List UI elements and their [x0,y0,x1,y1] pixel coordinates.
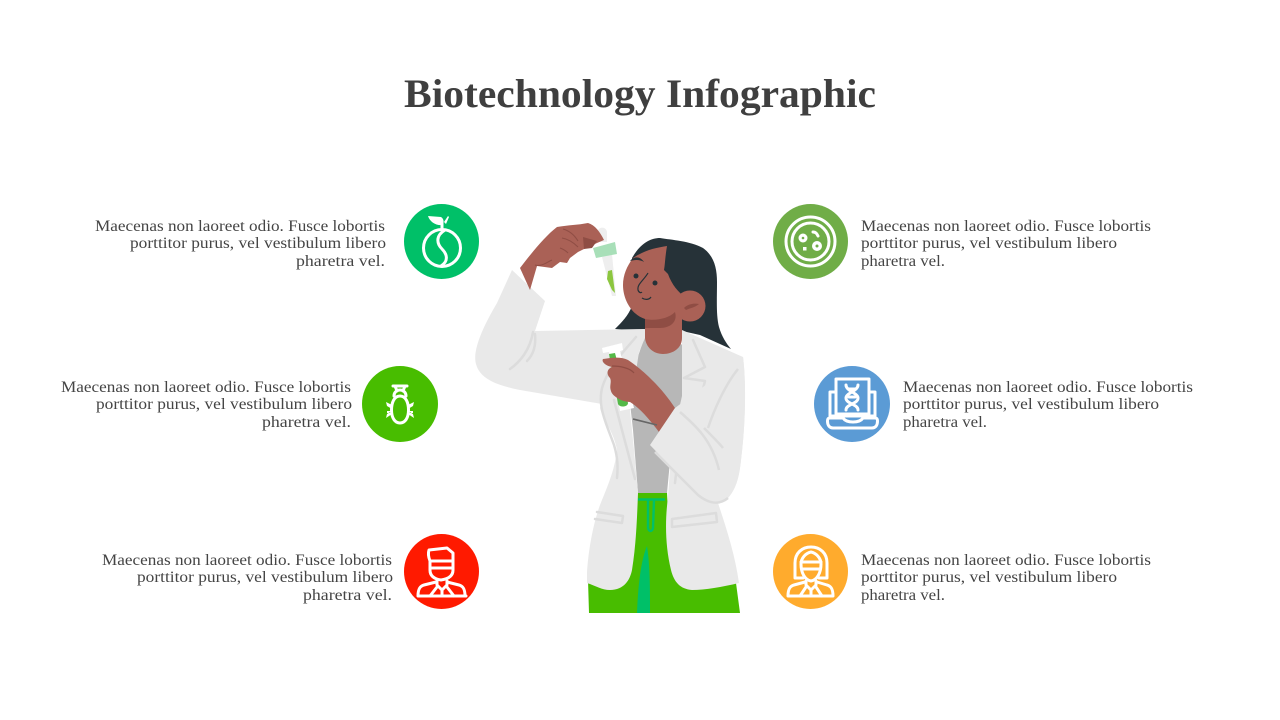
coat folds [510,332,717,527]
text block: bottom left: porttitor purus, vel vestibulum libero [137,569,393,586]
dropper [597,228,616,296]
dropper cap [583,237,617,258]
text block: middle right: porttitor purus, vel vestibulum libero [903,396,1159,413]
text block: top left [95,218,386,270]
hair back [615,238,731,349]
head [623,246,706,328]
lab coat body [587,329,745,590]
text block: bottom right: pharetra vel. [861,587,945,604]
text block: top left: Maecenas non laoreet odio. Fusce lobortis [95,218,385,235]
title: Biotechnology Infographic [404,71,876,116]
icon: woman with face mask [773,534,848,609]
text block: bottom left [102,552,393,604]
grey shirt [628,336,684,493]
icon: bug [362,366,438,442]
illustration: scientist with dropper and test tube [475,223,745,613]
text block: middle left: Maecenas non laoreet odio. Fusce lobortis [61,379,351,396]
text block: bottom right [861,552,1151,604]
text block: top left: pharetra vel. [296,253,385,270]
text block: bottom right: Maecenas non laoreet odio. Fusce lobortis [861,552,1151,569]
pants [588,492,740,613]
icon: man with face mask [404,534,479,609]
forearm and hand holding test tube [602,343,675,432]
text block: middle right: Maecenas non laoreet odio. Fusce lobortis [903,379,1193,396]
text block: middle right [903,379,1193,431]
text block: top right: porttitor purus, vel vestibulum libero [861,235,1117,252]
icon: laptop with DNA [814,366,890,442]
text block: middle left: pharetra vel. [262,414,351,431]
text block: bottom right: porttitor purus, vel vestibulum libero [861,569,1117,586]
icon: petri dish [773,204,848,279]
text block: top left: porttitor purus, vel vestibulum libero [130,235,386,252]
text block: bottom left: pharetra vel. [303,587,392,604]
text block: top right: Maecenas non laoreet odio. Fusce lobortis [861,218,1151,235]
raised hand [520,223,604,290]
sleeve over forearm [650,357,745,503]
text block: middle left [61,379,352,431]
icon: fruit [404,204,479,279]
text block: top right: pharetra vel. [861,253,945,270]
raised arm sleeve [475,270,645,404]
text block: middle left: porttitor purus, vel vestibulum libero [96,396,352,413]
stethoscope line [633,419,657,425]
text block: middle right: pharetra vel. [903,414,987,431]
text block: top right [861,218,1151,270]
neck [645,315,682,354]
text block: bottom left: Maecenas non laoreet odio. Fusce lobortis [102,552,392,569]
